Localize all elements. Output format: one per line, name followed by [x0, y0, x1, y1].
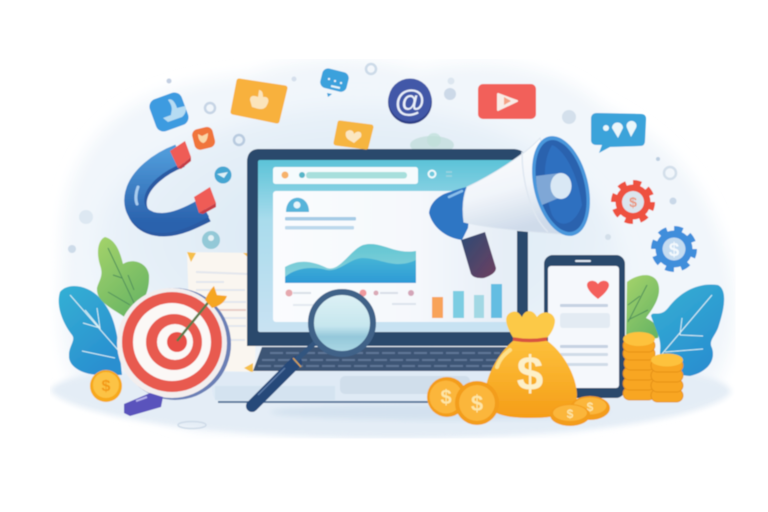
- money bag: $: [517, 348, 544, 401]
- icon: teal swirl: [214, 166, 232, 184]
- handle: [461, 232, 496, 278]
- coin: $: [440, 387, 452, 409]
- icon: heart: [587, 281, 609, 299]
- coin: [570, 396, 610, 420]
- laptop screen: [258, 160, 517, 332]
- coin stacks: [623, 332, 683, 402]
- coin: [455, 381, 499, 425]
- red tips: [170, 141, 191, 168]
- laptop frame: [247, 149, 528, 346]
- money bag: [485, 311, 577, 418]
- icon: red gear: $: [629, 194, 637, 210]
- coin: $: [567, 407, 574, 421]
- icon: at sign: @: [395, 83, 425, 118]
- blue leaf left: [59, 286, 122, 375]
- dart: [177, 286, 227, 341]
- magnifying glass: [252, 292, 373, 406]
- magnet: [134, 141, 216, 226]
- icon: orange like card: [233, 81, 285, 121]
- green leaf right: [626, 275, 659, 342]
- area chart: [285, 244, 416, 283]
- document paper: [187, 252, 257, 373]
- icon: blue gear: $: [669, 240, 680, 261]
- content panel: [273, 191, 517, 322]
- icon: video play: [478, 84, 536, 119]
- icon: small chat bubble: [319, 67, 350, 97]
- megaphone: [429, 130, 600, 278]
- left leaves: [59, 237, 149, 375]
- coin left: $: [102, 378, 111, 395]
- white cone: [463, 138, 568, 235]
- icon: red gear: [614, 183, 652, 221]
- icon: heart card: [336, 123, 371, 147]
- purple tag: [124, 393, 163, 416]
- coin: [427, 377, 467, 417]
- rear blue grip: [429, 186, 472, 240]
- ground shadow ellipse: [50, 370, 731, 438]
- decorative dots and rings: [68, 64, 676, 428]
- icon: thumbs up: [147, 90, 191, 134]
- icon: blue gear: [654, 229, 694, 269]
- dartboard target: [117, 286, 231, 400]
- coin left: [90, 370, 122, 402]
- coins in front of bag: [427, 377, 610, 426]
- coin: $: [471, 391, 483, 416]
- coin: $: [587, 400, 594, 414]
- keyboard: [253, 347, 510, 371]
- background cloud: [60, 59, 735, 430]
- icon: at sign: [388, 78, 432, 124]
- green leaf left: [97, 237, 149, 318]
- icon: small orange heart: [191, 126, 216, 151]
- right leaves: [626, 275, 724, 376]
- laptop: [212, 149, 528, 402]
- left stack: [623, 339, 655, 400]
- laptop base: [212, 370, 500, 402]
- avatar and text lines: [285, 198, 356, 230]
- coin: [550, 404, 590, 426]
- horn opening: [522, 130, 600, 242]
- legend dots: [286, 290, 416, 306]
- right stack: [651, 359, 683, 402]
- bar chart: [432, 284, 502, 318]
- icon: speech bubble: [591, 113, 646, 153]
- browser bar: [273, 167, 452, 184]
- blue leaf right: [651, 284, 724, 376]
- smartphone: [544, 255, 625, 398]
